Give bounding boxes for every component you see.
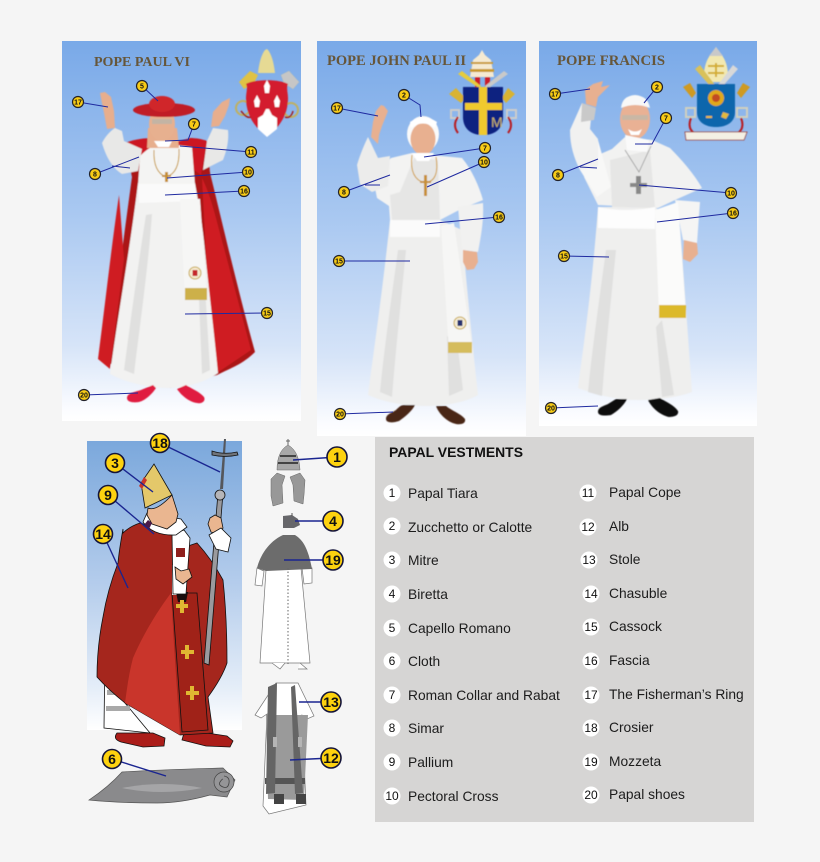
callouts: Pope John Paul II: 20 [336,412,344,418]
legend column: items 11 to 20: 19 [584,755,598,769]
legend column: items 1 to 10: 7 [389,688,396,702]
callouts: individual garments: 13 [323,694,339,710]
legend column: items 11 to 20: Cassock [609,619,662,634]
legend column: items 11 to 20: 20 [584,788,598,802]
legend column: items 11 to 20: The Fisherman’s Ring [609,687,744,702]
panel: Pope John Paul II [317,41,526,436]
legend column: items 1 to 10: 10 [385,789,399,803]
callouts: Pope Paul VI: 10 [244,170,252,176]
legend column: items 11 to 20: Chasuble [609,586,668,601]
legend column: items 11 to 20: Papal Cope [609,485,681,500]
legend column: items 1 to 10: 1 [389,486,396,500]
callouts: individual garments [284,447,347,768]
icon: biretta [283,513,300,528]
callouts: Pope John Paul II: 17 [333,106,341,112]
callouts: Pope Francis: 20 [547,406,555,412]
callouts: Pope Paul VI: 16 [240,188,248,196]
legend column: items 1 to 10: Biretta [408,587,448,602]
title: Pope Paul VI: POPE PAUL VI [94,54,190,69]
legend column: items 1 to 10: Simar [408,721,444,736]
callouts: Pope Paul VI: 7 [192,122,196,128]
panel: Pope Francis [539,41,757,426]
legend column: items 11 to 20: Stole [609,552,641,567]
callouts: Pope Francis: 8 [556,172,560,180]
coat of arms: John Paul II [449,50,516,135]
callouts: Pope John Paul II: 10 [480,160,488,166]
title: Pope Francis: POPE FRANCIS [557,53,665,69]
legend column: items 11 to 20 [580,484,744,804]
legend column: items 11 to 20: 13 [582,553,596,567]
legend column: items 11 to 20: 17 [584,688,598,702]
panel: individual garments [255,439,347,814]
title: Pope John Paul II: POPE JOHN PAUL II [327,53,466,69]
callouts: Pope John Paul II: 2 [402,92,406,100]
legend column: items 1 to 10: Pectoral Cross [408,789,499,804]
callouts: Pope Francis: 16 [729,210,737,218]
icon: papal tiara [271,439,305,506]
legend column: items 11 to 20: 15 [584,620,598,634]
callouts: Pope John Paul II: 8 [342,190,346,196]
legend column: items 11 to 20: Crosier [609,720,654,735]
icon: cassock with mozzetta [255,535,312,669]
callouts: vestments figure: 9 [104,487,112,503]
callouts: Pope Francis: 2 [655,84,659,92]
figure: Pope Francis [570,81,702,417]
legend column: items 11 to 20: Mozzeta [609,754,661,769]
coat of arms: Paul VI [236,45,299,137]
legend column: items 1 to 10: Roman Collar and Rabat [408,688,560,703]
legend column: items 1 to 10: Capello Romano [408,621,511,636]
legend column: items 11 to 20: 14 [584,587,598,601]
figure: Pope Paul VI [98,92,255,403]
legend column: items 1 to 10 [384,484,560,804]
panel: Pope Paul VI [62,41,301,421]
legend column: items 1 to 10: Zucchetto or Calotte [408,520,533,535]
callouts: vestments figure: 14 [95,526,111,542]
callouts: Pope John Paul II: 16 [495,214,503,222]
legend column: items 1 to 10: 5 [389,621,396,635]
callouts: Pope Paul VI: 5 [140,84,144,90]
callouts: Pope Paul VI: 8 [93,172,97,178]
coat of arms: Francis [683,47,750,140]
figure: pope with mitre and crosier [97,439,238,747]
legend column: items 1 to 10: 4 [389,587,396,601]
legend column: items 1 to 10: 8 [389,721,396,735]
callouts: Pope Paul VI: 17 [74,100,82,106]
legend column: items 11 to 20: 16 [584,654,598,668]
callouts: Pope John Paul II: 7 [483,146,487,152]
legend column: items 1 to 10: 9 [389,755,396,769]
callouts: Pope Paul VI: 15 [263,310,271,318]
callouts: Pope Francis: 7 [664,116,668,122]
callouts: vestments figure [94,434,220,776]
panel: legend of papal vestments [375,437,754,822]
callouts: Pope Paul VI: 20 [80,392,88,400]
legend column: items 11 to 20: Papal shoes [609,787,685,802]
callouts: individual garments: 19 [325,552,341,568]
callouts: individual garments: 12 [323,750,339,766]
callouts: Pope John Paul II [332,90,504,420]
legend column: items 11 to 20: 12 [581,520,595,534]
legend column: items 1 to 10: Cloth [408,654,440,669]
coat of arms: John Paul II: M [491,114,503,130]
icon: alb and stole [255,683,314,814]
icon: cloth roll [89,768,235,803]
legend column: items 1 to 10: Papal Tiara [408,486,478,501]
callouts: vestments figure: 3 [111,455,119,471]
legend heading: PAPAL VESTMENTS [389,444,523,460]
legend column: items 1 to 10: Mitre [408,553,439,568]
legend column: items 1 to 10: Pallium [408,755,453,770]
callouts: Pope Francis: 17 [551,92,559,98]
callouts: individual garments: 4 [329,513,337,529]
callouts: vestments figure: 6 [108,751,116,767]
callouts: Pope Paul VI [72,80,272,400]
callouts: Pope Paul VI: 11 [247,150,255,156]
legend column: items 1 to 10: 6 [389,654,396,668]
legend column: items 1 to 10: 2 [389,519,396,533]
callouts: Pope Francis: 15 [560,254,568,260]
callouts: vestments figure: 18 [152,435,168,451]
callouts: individual garments: 1 [333,449,341,465]
legend column: items 11 to 20: 11 [582,486,595,500]
legend column: items 1 to 10: 3 [389,553,396,567]
figure: Pope John Paul II [357,105,483,424]
callouts: Pope John Paul II: 15 [335,258,343,266]
panel: liturgical vestments figure [87,434,242,803]
legend column: items 11 to 20: Alb [609,519,629,534]
callouts: Pope Francis [546,82,738,414]
legend column: items 11 to 20: 18 [584,721,598,735]
legend column: items 11 to 20: Fascia [609,653,650,668]
callouts: Pope Francis: 10 [727,190,735,198]
